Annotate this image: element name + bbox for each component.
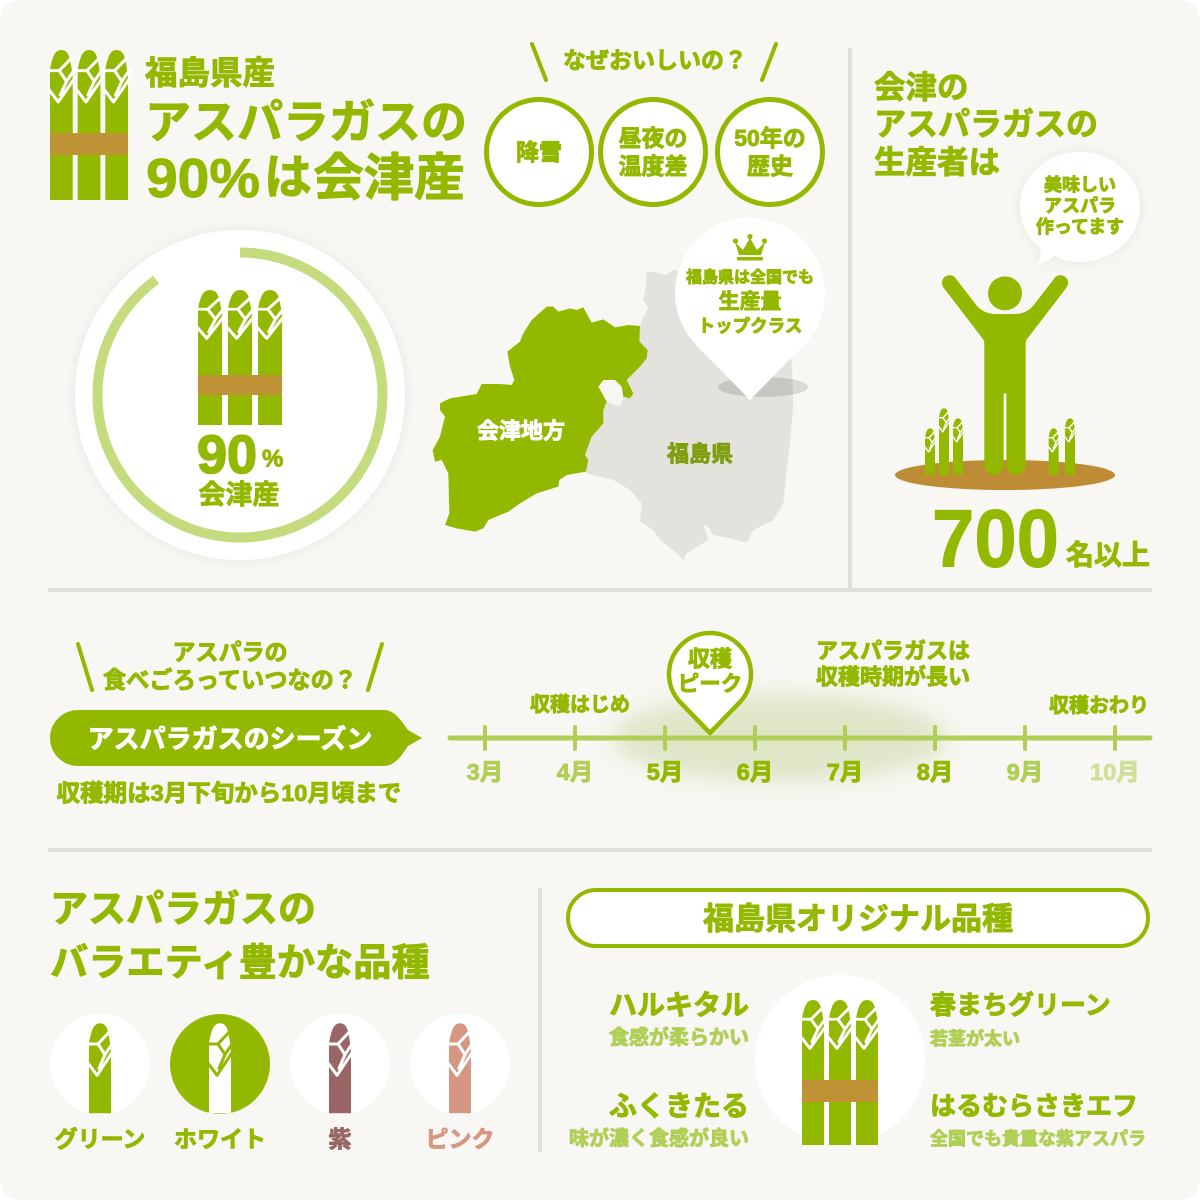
highlight: peak glow (612, 694, 948, 782)
variety: Fuku Kitaru (569, 1090, 749, 1150)
speech bubble: 美味しい (1044, 174, 1116, 195)
chart: season timeline: 5月 (647, 759, 683, 785)
callout: top class pin: 生産量 (718, 290, 782, 314)
title: 福島県産 (145, 55, 275, 91)
circle: snowfall: 降雪 (516, 139, 562, 165)
label: Aizu: 会津地方 (477, 418, 565, 444)
chart: season timeline: 9月 (1007, 759, 1043, 785)
icon: farmer with asparagus (895, 275, 1115, 490)
heading: why delicious: なぜおいしいの？ (563, 47, 747, 73)
circle: temperature difference (600, 100, 706, 204)
title (145, 55, 467, 209)
circle: history: 50年の (734, 125, 806, 151)
statistic: producers count: 700 (932, 494, 1059, 584)
variety: Harumachi Green: 若茎が太い (930, 1028, 1020, 1049)
panel: 90 percent donut (75, 230, 405, 560)
statistic: producers count: 名以上 (1066, 540, 1150, 570)
callout: top class pin (675, 218, 825, 400)
heading: producers: 会津の (874, 69, 969, 105)
chart: season timeline: 4月 (557, 759, 593, 785)
chart: season timeline: 3月 (467, 759, 503, 785)
title: 会津産 (313, 150, 465, 206)
variety: purple: 紫 (328, 1126, 352, 1152)
chart: season timeline (450, 727, 1150, 785)
text: long harvest: アスパラガスは (816, 638, 970, 664)
heading: producers: 生産者は (874, 144, 1000, 180)
speech bubble: 作ってます (1036, 217, 1124, 237)
heading: when in season (78, 639, 382, 693)
variety: Haru Kitaru (609, 990, 749, 1049)
speech bubble (1020, 152, 1140, 264)
variety: pink: ピンク (426, 1126, 494, 1152)
text: long harvest: 収穫時期が長い (816, 664, 970, 690)
circle: temperature difference: 温度差 (618, 153, 688, 179)
callout: harvest peak pin: 収穫 (688, 646, 732, 672)
icon: asparagus bundle in donut (197, 290, 284, 425)
heading: when in season: アスパラの (172, 639, 288, 665)
heading: why delicious (532, 44, 776, 80)
heading: producers: アスパラガスの (874, 106, 1098, 142)
callout: top class pin: 福島県は全国でも (686, 268, 814, 286)
circle: history: 歴史 (747, 153, 793, 179)
variety: white: ホワイト (174, 1126, 266, 1152)
chart: season timeline: 7月 (827, 759, 863, 785)
heading: varieties: バラエティ豊かな品種 (50, 942, 430, 984)
variety: Fuku Kitaru: 味が濃く食感が良い (569, 1126, 749, 1150)
title: 90% (146, 147, 260, 209)
title: アスパラガスの (145, 96, 467, 148)
variety: Haru Kitaru: ハルキタル (609, 990, 749, 1020)
icon: asparagus bundle in circle (755, 975, 925, 1145)
variety: Harumurasaki F: はるむらさきエフ (930, 1091, 1138, 1121)
text: harvest period: 収穫期は3月下旬から10月頃まで (57, 780, 401, 806)
panel: 90 percent donut: 90 (197, 425, 257, 485)
heading: Fukushima original varieties (568, 890, 1148, 946)
map: Aizu region (433, 307, 648, 532)
circle: temperature difference: 昼夜の (618, 125, 688, 151)
callout: top class pin: トップクラス (698, 316, 802, 336)
variety: purple (290, 1014, 390, 1152)
variety: Harumachi Green: 春まちグリーン (930, 990, 1111, 1020)
variety: Harumurasaki F (930, 1091, 1146, 1149)
banner: season pill: アスパラガスのシーズン (88, 724, 372, 754)
title: は (264, 152, 312, 204)
variety: Fuku Kitaru: ふくきたる (609, 1090, 749, 1122)
label: harvest start: 収穫はじめ (530, 693, 630, 716)
banner: season pill (50, 710, 422, 766)
label: harvest end: 収穫おわり (1049, 694, 1149, 717)
chart: season timeline: 10月 (1090, 759, 1140, 785)
heading: varieties: アスパラガスの (50, 889, 316, 931)
heading: when in season: 食べごろっていつなの？ (103, 667, 357, 693)
heading: producers (874, 69, 1098, 180)
circle: snowfall (486, 100, 592, 204)
variety: Haru Kitaru: 食感が柔らかい (609, 1025, 749, 1049)
icon: sprouts (924, 408, 1076, 475)
variety: green: グリーン (55, 1126, 145, 1152)
variety: pink (410, 1014, 510, 1152)
icon: asparagus bundle (49, 50, 130, 200)
speech bubble: アスパラ (1044, 196, 1116, 216)
chart: season timeline: 8月 (917, 759, 953, 785)
panel: 90 percent donut: % (262, 446, 283, 472)
statistic: producers count (932, 494, 1150, 584)
heading: Fukushima original varieties: 福島県オリジナル品種 (703, 902, 1013, 936)
map: Fukushima prefecture (433, 270, 793, 560)
variety: Harumachi Green (930, 990, 1111, 1049)
panel: 90 percent donut: 会津産 (198, 480, 280, 510)
callout: harvest peak pin (669, 633, 751, 733)
text: long harvest (816, 638, 970, 690)
chart: season timeline: 6月 (737, 759, 773, 785)
label: Fukushima: 福島県 (667, 442, 733, 466)
variety: Harumurasaki F: 全国でも貴重な紫アスパラ (930, 1129, 1146, 1149)
icon: crown (733, 234, 767, 260)
circle: history (718, 100, 822, 204)
callout: harvest peak pin: ピーク (678, 672, 742, 696)
heading: varieties (50, 889, 430, 984)
variety: green (50, 1014, 150, 1152)
variety: white (170, 1014, 270, 1152)
